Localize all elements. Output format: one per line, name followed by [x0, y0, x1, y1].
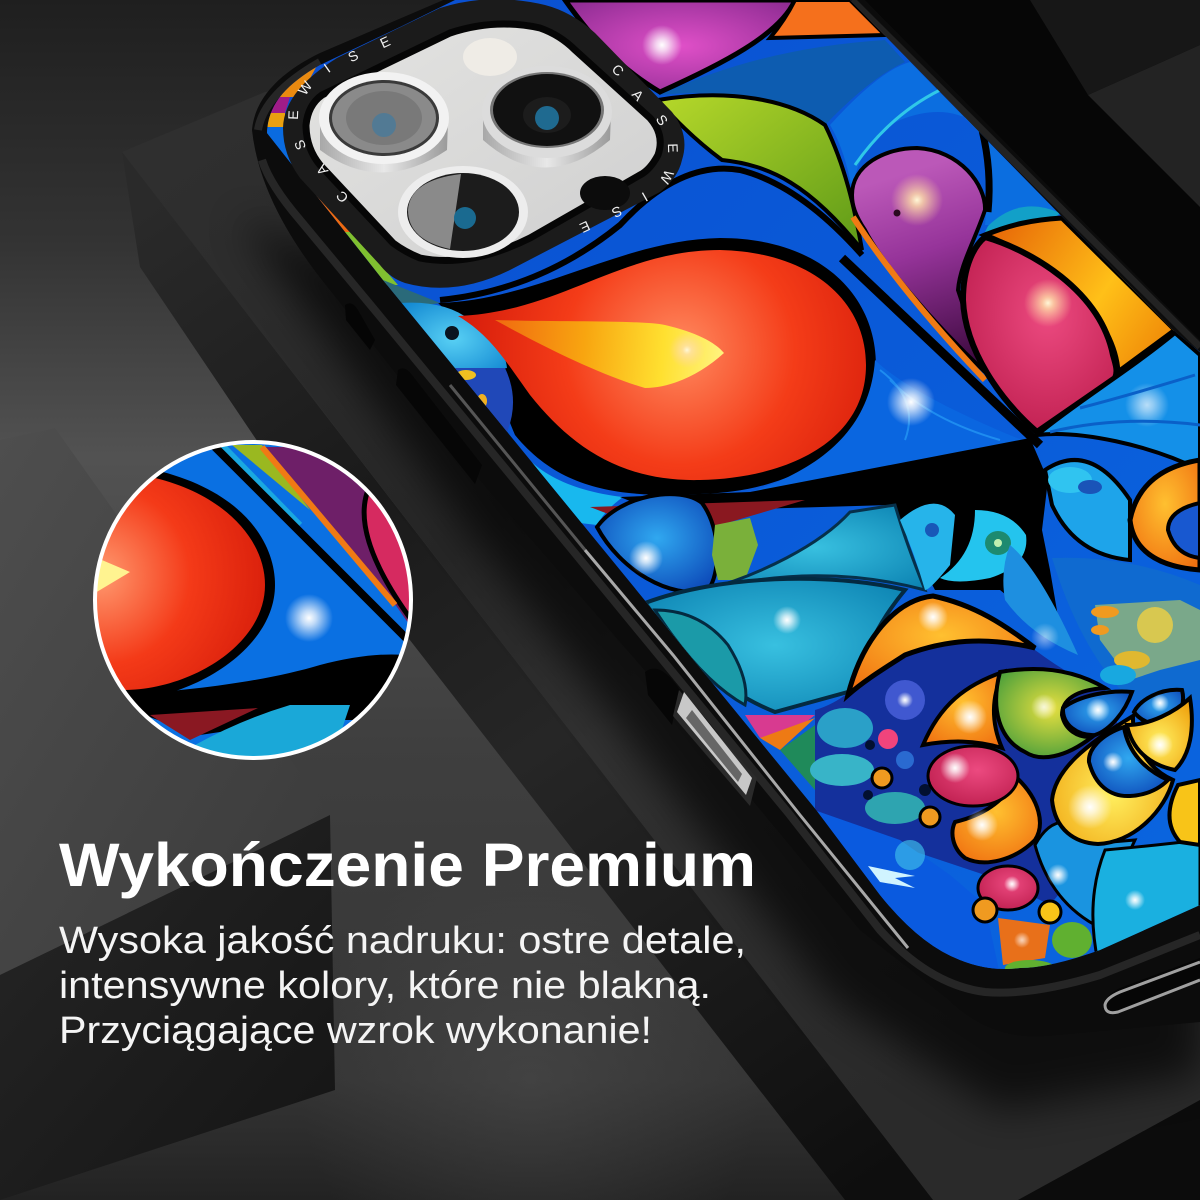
circle: red outline: [90, 468, 275, 700]
circle: black lower band: [120, 654, 405, 735]
lens: bottom: [398, 166, 528, 258]
circle: pink petal: [364, 480, 420, 625]
art: blue textured region: [1052, 558, 1200, 700]
zoom detail circle: [90, 440, 420, 765]
art: cyan leaf upper right: [1045, 460, 1130, 560]
circle: yellow flame: [90, 555, 130, 596]
island lettering left: S: [345, 47, 361, 65]
art: teal streak: [985, 206, 1060, 232]
island lettering right: W: [656, 167, 677, 187]
circle: dark red strip: [150, 708, 258, 740]
circle: green sliver: [232, 445, 310, 510]
art: blue petals: [1063, 690, 1183, 735]
circle: purple panel: [263, 447, 420, 640]
island lettering left: C: [333, 188, 351, 206]
art: orange right petal: [985, 218, 1175, 372]
island lettering left: S: [291, 138, 309, 152]
art: cyan wedge: [532, 462, 622, 525]
art: dark red strip: [590, 500, 805, 526]
camera island: [283, 0, 684, 288]
art: large yellow petal: [1052, 716, 1173, 844]
art: light blue bottom petals: [1035, 822, 1200, 962]
art: small beads: [872, 729, 940, 827]
art: mosaic centre: [1091, 600, 1200, 685]
art: pink bubble: [928, 746, 1018, 806]
art: black line above blue teardrop: [440, 169, 862, 300]
art: left speckled patch: [383, 280, 440, 310]
art: orange stripe: [853, 217, 985, 380]
island lettering right: C: [609, 61, 627, 79]
phone case body: [252, 0, 1200, 1036]
body text: [59, 920, 746, 1052]
art: black diagonal line: [842, 258, 1040, 445]
body text: intensywne kolory, które nie blakną.: [59, 965, 711, 1007]
art: bottom left blue and bolt: [817, 811, 1000, 975]
art: bottom orange and green blobs: [973, 898, 1092, 976]
art: flame glow: [670, 334, 703, 366]
art: blue right wing: [1037, 333, 1200, 470]
art: blue bubble: [597, 494, 717, 592]
island lettering left: W: [295, 77, 316, 98]
island lettering right: E: [665, 143, 681, 153]
art: pink drop: [963, 237, 1116, 432]
art: blue region above purple: [830, 62, 1060, 225]
art: deep blue swirl: [815, 642, 1135, 905]
phone shadow: [240, 220, 1200, 1110]
flash: [463, 38, 517, 76]
island lettering left: [285, 33, 393, 206]
art: top magenta petal: [565, 0, 795, 92]
island lettering right: [577, 61, 681, 236]
art: navy blob: [455, 368, 513, 432]
island lettering right: E: [577, 218, 593, 236]
art: yellow petal upper: [1127, 698, 1192, 770]
art: green blob: [712, 518, 758, 580]
island lettering left: A: [312, 161, 331, 178]
art: lower orange petal: [952, 778, 1040, 862]
island lettering left: E: [285, 110, 301, 120]
art: green leaf: [658, 95, 862, 250]
art: black outline around red drop: [438, 238, 876, 495]
circle: cyan stripe: [222, 445, 300, 525]
art: orange right spiral: [1130, 460, 1200, 570]
art: cyan streak: [855, 90, 940, 165]
art: black line beside purple: [982, 130, 989, 212]
art: blue triangle right of red drop: [745, 360, 1022, 494]
art: purple drop: [852, 148, 985, 372]
art: orange fin: [848, 596, 1035, 695]
circle: white ring: [95, 442, 411, 758]
art: cyan fish: [400, 303, 507, 375]
body text: Przyciągające wzrok wykonanie!: [59, 1010, 652, 1052]
island lettering left: E: [377, 33, 393, 51]
island lettering right: I: [639, 189, 651, 205]
art: bottom pink bubble: [978, 866, 1038, 910]
title: Wykończenie Premium: [59, 831, 756, 899]
art: red drop: [458, 250, 866, 480]
microphone hole: [580, 176, 630, 210]
art: black band below drop: [620, 438, 1058, 612]
art: left edge multicolour fan: [745, 715, 815, 790]
art: top orange wedge: [770, 0, 885, 38]
island lettering right: S: [609, 203, 625, 221]
art: teal fan lower: [645, 579, 905, 712]
circle: highlight: [285, 594, 333, 642]
island lettering right: A: [629, 86, 648, 104]
art: right of fan bubbles: [900, 504, 1078, 655]
lens: upper left: [319, 72, 449, 172]
phone artwork: [250, 0, 1200, 1000]
island lettering right: S: [653, 112, 671, 128]
art: teal fan upper: [705, 505, 925, 590]
lens: upper right: [482, 66, 612, 168]
art: teal textured blobs: [810, 680, 931, 824]
silver action button: [673, 690, 757, 806]
circle: lower teal shapes: [195, 705, 350, 765]
circle: orange stripe: [262, 447, 395, 605]
charging port: [1103, 958, 1200, 1014]
circle: black diagonal: [213, 445, 408, 640]
art: yellow petal right: [1169, 780, 1200, 845]
art: yellow flame: [495, 320, 724, 388]
side buttons: [345, 303, 680, 725]
island lettering left: I: [321, 60, 333, 76]
body text: Wysoka jakość nadruku: ostre detale,: [59, 920, 746, 962]
art: strip colours left of camera: [262, 60, 398, 285]
art: green petal: [996, 669, 1105, 757]
art: orange petal: [923, 672, 1003, 748]
camera glass plate: [306, 24, 660, 260]
circle: red drop: [90, 478, 265, 690]
art: dark blue band top right: [660, 40, 905, 125]
